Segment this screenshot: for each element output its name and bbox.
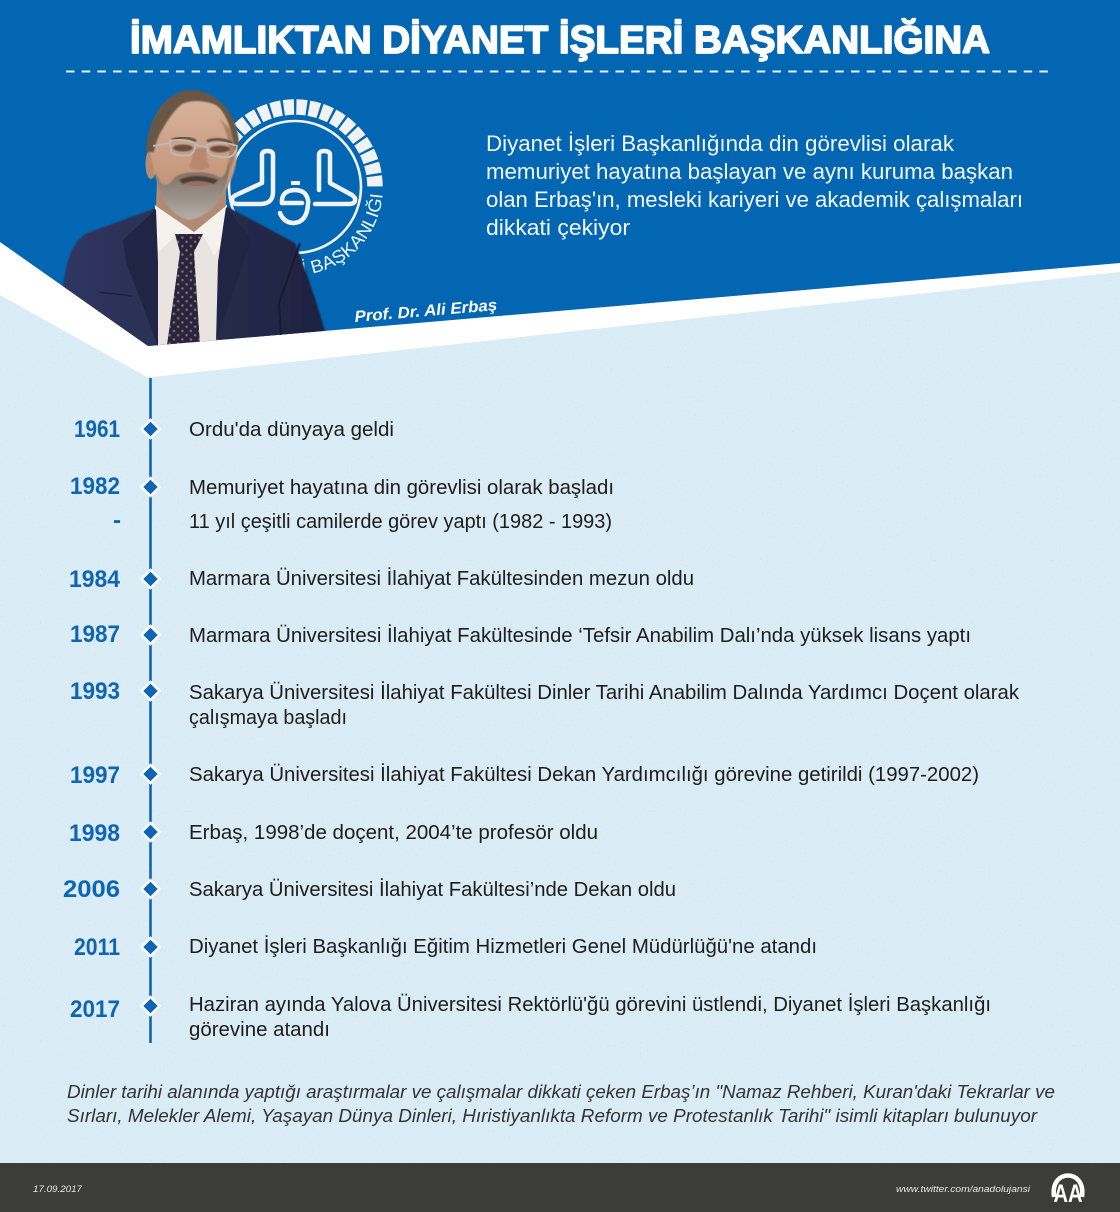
portrait: Prof. Dr. Ali Erbaş	[62, 90, 326, 348]
timeline years: 1982	[70, 473, 120, 500]
timeline years: 1984	[69, 566, 121, 593]
timeline events: Marmara Üniversitesi İlahiyat Fakültesinden mezun oldu	[189, 567, 694, 590]
timeline events: Memuriyet hayatına din görevlisi olarak başladı	[189, 477, 614, 499]
nose	[189, 148, 210, 170]
timeline axis	[149, 378, 152, 1043]
date: 17.09.2017	[33, 1184, 83, 1195]
intro text: Diyanet İşleri Başkanlığında din görevlisi olarak	[486, 131, 955, 156]
pocket	[99, 292, 132, 296]
hair	[146, 90, 239, 152]
sleeve seam	[279, 243, 300, 335]
timeline years: 2006	[63, 876, 120, 903]
tie	[167, 234, 203, 345]
timeline events: Diyanet İşleri Başkanlığı Eğitim Hizmetleri Genel Müdürlüğü'ne atandı	[189, 935, 817, 958]
intro text: olan Erbaş'ın, mesleki kariyeri ve akademik çalışmaları	[486, 187, 1023, 212]
timeline years	[63, 416, 121, 1023]
ear	[146, 151, 156, 179]
eye shadows	[173, 144, 193, 152]
jacket	[62, 206, 326, 348]
timeline events: Ordu'da dünyaya geldi	[189, 419, 394, 441]
mouth	[184, 182, 212, 186]
timeline markers	[142, 420, 160, 1015]
timeline events: çalışmaya başladı	[189, 707, 347, 729]
intro text: dikkati çekiyor	[486, 215, 630, 240]
intro text	[486, 131, 1023, 240]
face	[150, 100, 238, 192]
name caption: Prof. Dr. Ali Erbaş	[354, 297, 498, 326]
timeline events: Haziran ayında Yalova Üniversitesi Rektörlü'ğü görevini üstlendi, Diyanet İşleri Başkanlığı	[189, 993, 991, 1016]
shirt	[155, 205, 227, 346]
lapels	[123, 207, 227, 346]
timeline years: 2011	[74, 934, 120, 961]
beard	[156, 160, 229, 220]
footer	[0, 1163, 1120, 1212]
timeline events: Sakarya Üniversitesi İlahiyat Fakültesi’nde Dekan oldu	[189, 878, 676, 901]
title: İMAMLIKTAN DİYANET İŞLERİ BAŞKANLIĞINA	[130, 18, 990, 62]
timeline events: Marmara Üniversitesi İlahiyat Fakültesinde ‘Tefsir Anabilim Dalı’nda yüksek lisans yaptı	[189, 624, 971, 647]
timeline years: 1997	[70, 762, 120, 789]
logo: Diyanet emblem: İ BAŞKANLIĞI	[302, 194, 382, 274]
source url: www.twitter.com/anadolujansi	[896, 1184, 1031, 1195]
timeline years: 1961	[74, 416, 120, 443]
logo: Diyanet emblem	[228, 99, 383, 274]
closing note: Sırları, Melekler Alemi, Yaşayan Dünya Dinleri, Hıristiyanlıkta Reform ve Protestanlık Tarihi" isimli kitapları bulunuyor	[67, 1105, 1038, 1126]
neck	[156, 180, 226, 232]
moustache	[179, 176, 218, 184]
timeline events: Erbaş, 1998’de doçent, 2004’te profesör oldu	[189, 822, 598, 844]
icon: Anadolu Agency logo: AA	[1054, 1180, 1082, 1208]
timeline years: -	[113, 507, 121, 534]
white band under header	[0, 242, 1120, 378]
glasses	[153, 140, 237, 157]
timeline years: 2017	[70, 996, 120, 1023]
eyebrows	[172, 138, 232, 143]
timeline events: görevine atandı	[189, 1019, 330, 1041]
blue header panel	[0, 0, 1120, 346]
closing note	[67, 1081, 1055, 1126]
closing note: Dinler tarihi alanında yaptığı araştırmalar ve çalışmalar dikkati çeken Erbaş’ın "Namaz Rehberi, Kuran'daki Tekrarlar ve	[67, 1081, 1055, 1102]
collar	[155, 205, 227, 256]
timeline events: 11 yıl çeşitli camilerde görev yaptı (1982 - 1993)	[189, 511, 612, 533]
timeline events: Sakarya Üniversitesi İlahiyat Fakültesi Dinler Tarihi Anabilim Dalında Yardımcı Doçent olarak	[189, 681, 1020, 704]
timeline years: 1987	[70, 621, 120, 648]
timeline years: 1993	[70, 678, 120, 705]
intro text: memuriyet hayatına başlayan ve aynı kuruma başkan	[486, 159, 1013, 184]
cheek shadow	[220, 119, 235, 174]
timeline years: 1998	[69, 820, 120, 847]
timeline events: Sakarya Üniversitesi İlahiyat Fakültesi Dekan Yardımcılığı görevine getirildi (1997-2002)	[189, 763, 979, 786]
timeline events	[189, 419, 1020, 1041]
